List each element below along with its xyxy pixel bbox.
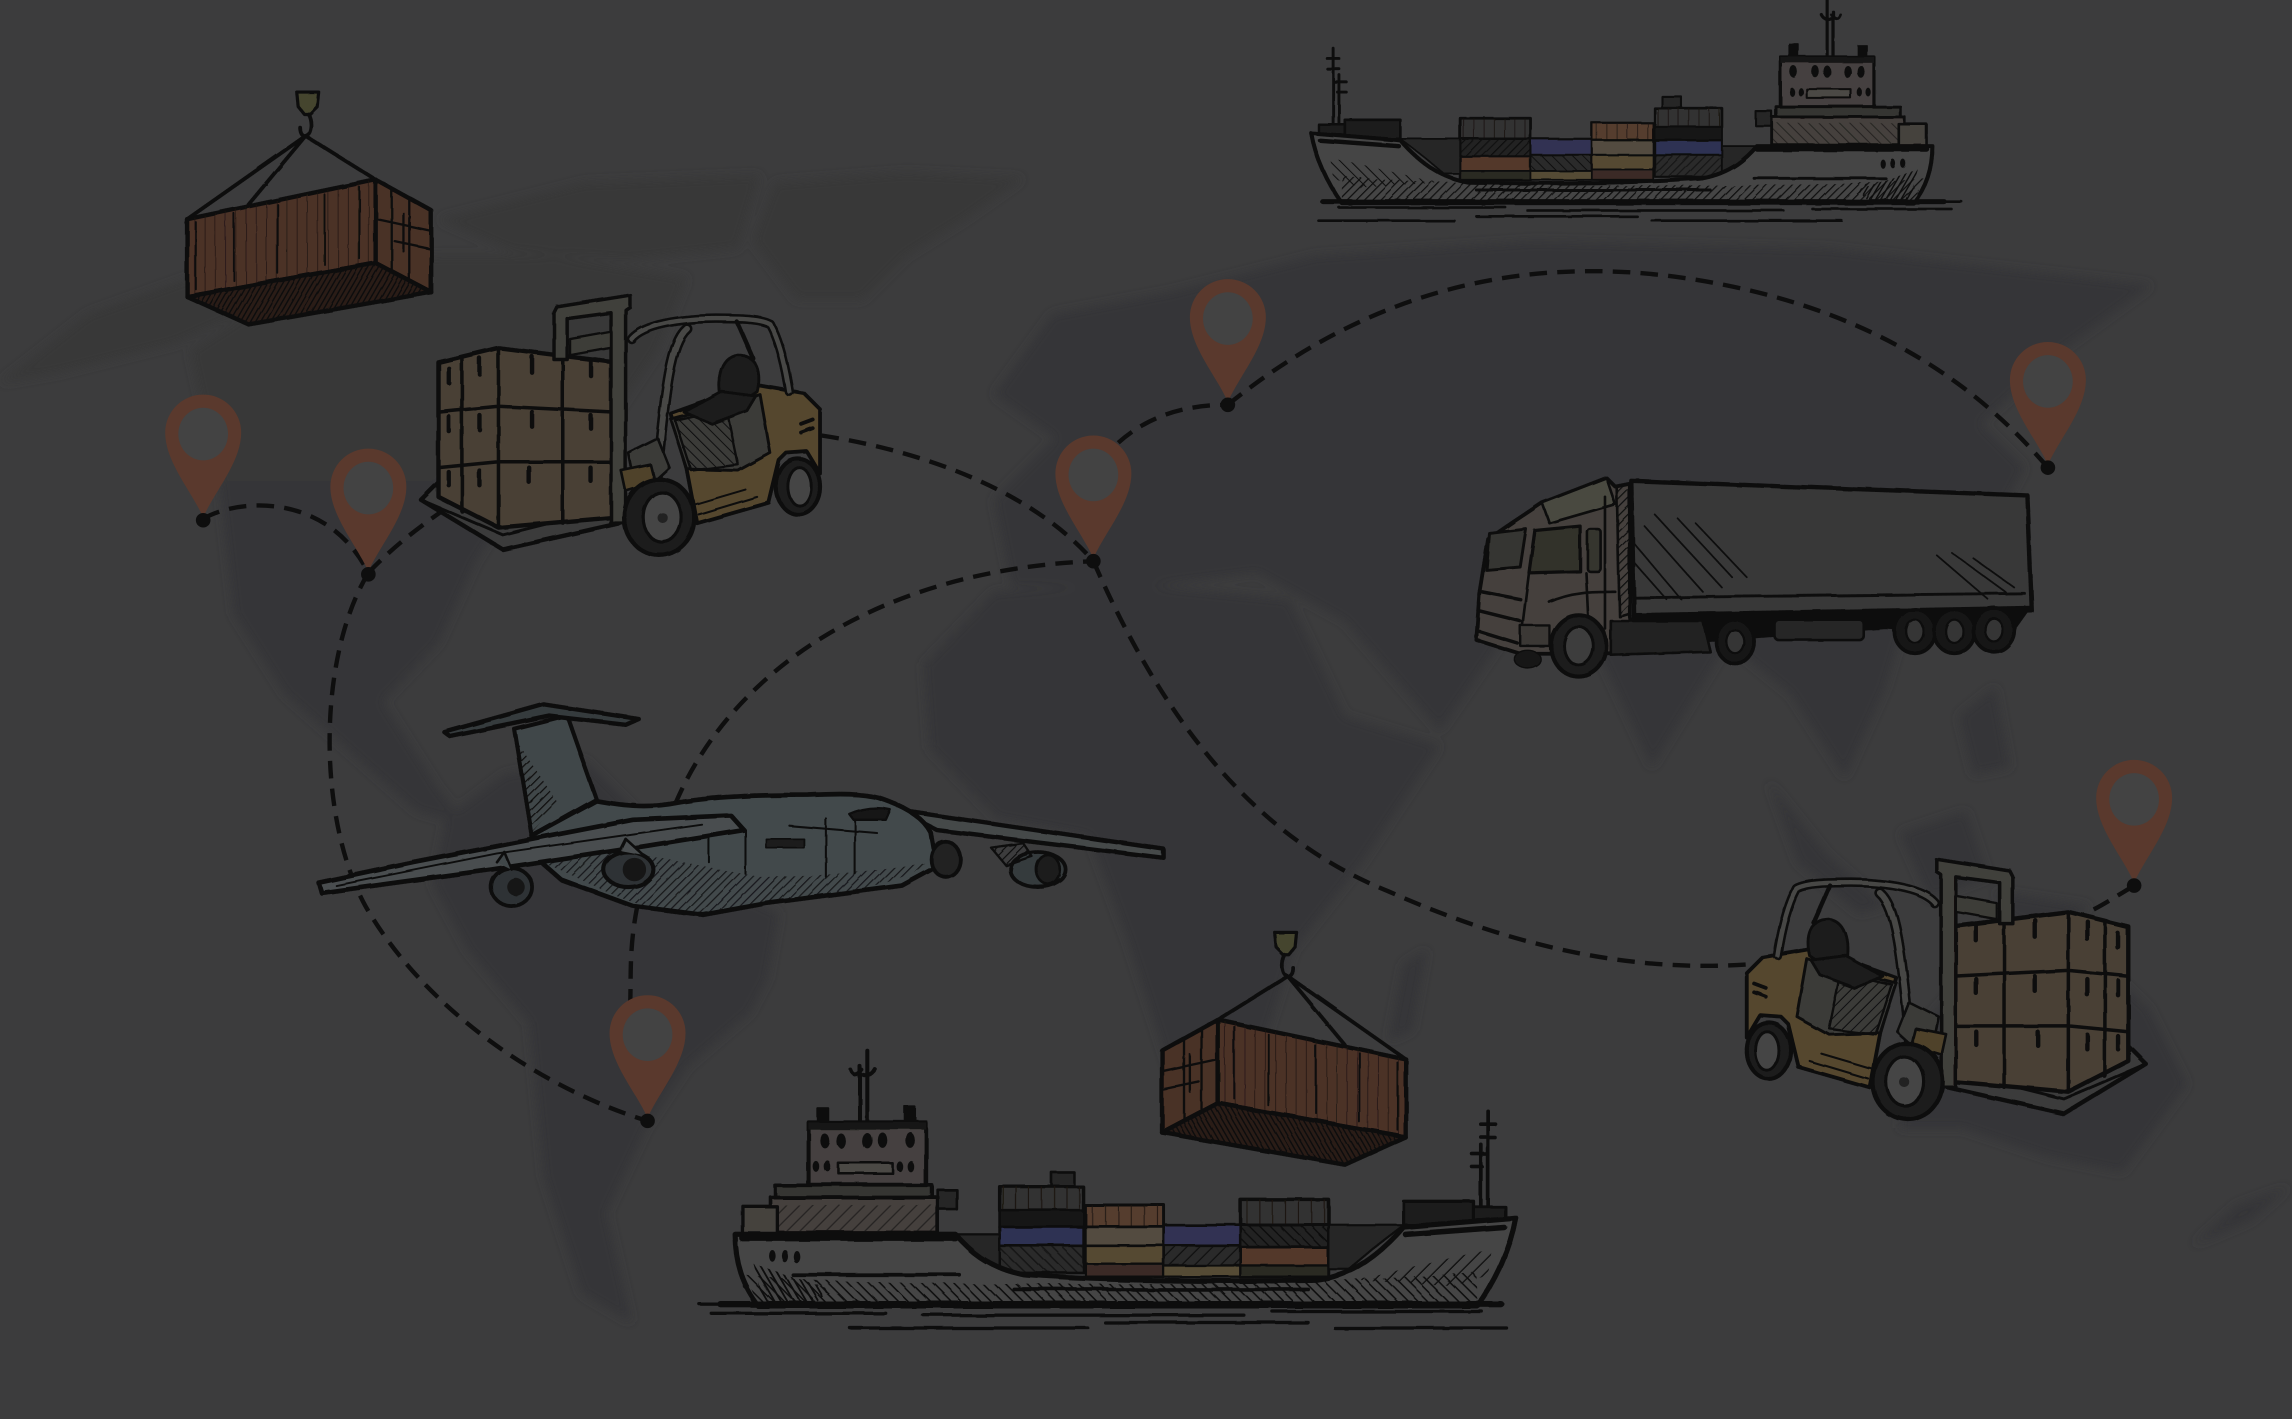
land: south america [433, 760, 779, 1323]
land: eurasia [994, 241, 2152, 777]
container hanging, center [1162, 932, 1406, 1165]
pin 2 [330, 449, 406, 582]
forklift, right [1747, 859, 2146, 1119]
location pins [165, 279, 2172, 1128]
container hanging, top left [187, 92, 431, 324]
cargo ship, top [1311, 0, 1962, 221]
pin 7 [610, 995, 686, 1128]
pin 3 [1055, 435, 1131, 568]
semi truck [1476, 478, 2032, 677]
land: southeast asia islands [1769, 687, 2090, 935]
pin 1 [165, 395, 241, 528]
pin 4 [1190, 279, 1266, 412]
pin 6 [2096, 760, 2172, 893]
land: new zealand [2193, 1187, 2289, 1245]
land: africa [924, 585, 1440, 1078]
land: madagascar [1389, 950, 1427, 1041]
dashed route lines [203, 271, 2134, 1121]
land: north america [219, 482, 512, 826]
land: australia [1900, 938, 2187, 1172]
cargo ship, bottom [698, 1051, 1516, 1328]
cargo plane [319, 704, 1164, 915]
pin 5 [2010, 342, 2086, 475]
land: arctic and greenland [0, 172, 1023, 482]
forklift, left [421, 295, 820, 555]
